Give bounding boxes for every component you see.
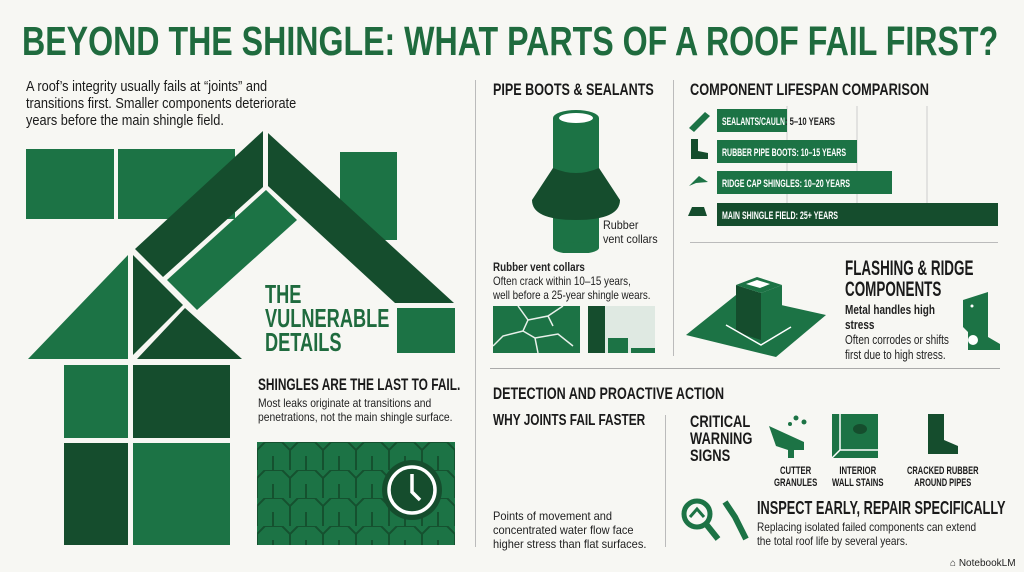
- icon: flashing chimney: [686, 277, 826, 357]
- text: shingles last: [258, 375, 460, 424]
- icon: gutter granules: GRANULES: [774, 477, 817, 489]
- icon: pipe boot: [532, 110, 620, 253]
- text: well before a 25-year shingle wears.: [493, 288, 651, 302]
- icon: wall stains: [832, 414, 884, 489]
- icon: gutter granules: CUTTER: [780, 465, 811, 477]
- heading: the vulnerable details: [265, 279, 389, 357]
- icon: wall stains: INTERIOR: [839, 465, 876, 477]
- icon: cracked rubber: [907, 414, 978, 489]
- icon: cracked rubber: [493, 306, 655, 353]
- text: flashing & ridge: Often corrodes or shifts: [845, 333, 949, 347]
- text: why joints fail: [493, 412, 646, 551]
- text: shingles last: Most leaks originate at transitions and penetrations, not the main shingle surface.: [258, 396, 452, 424]
- heading: detection: DETECTION AND PROACTIVE ACTION: [493, 384, 724, 403]
- intro text: [26, 79, 296, 129]
- bar chart: RIDGE CAP SHINGLES: 10–20 YEARS: [722, 178, 850, 190]
- icon: wall stains: WALL STAINS: [832, 477, 883, 489]
- intro text: transitions first. Smaller components deteriorate: [26, 96, 296, 112]
- text: flashing & ridge: [845, 257, 973, 362]
- text: flashing & ridge: stress: [845, 318, 874, 332]
- icon: cracked rubber: AROUND PIPES: [914, 477, 971, 489]
- title: BEYOND THE SHINGLE: WHAT PARTS OF A ROOF FAIL FIRST?: [22, 18, 998, 64]
- text: flashing & ridge: first due to high stress.: [845, 348, 946, 362]
- bar chart: SEALANTS/CAULN: [722, 116, 785, 128]
- text: inspect early: [757, 497, 1006, 548]
- text: flashing & ridge: Metal handles high: [845, 303, 935, 317]
- icon: bracket: [963, 292, 1000, 350]
- heading: critical warning signs: [690, 412, 752, 465]
- heading: critical warning signs: SIGNS: [690, 446, 730, 465]
- bar chart: : 5–10 YEARS: [785, 116, 835, 128]
- text: shingles last: SHINGLES ARE THE LAST TO FAIL.: [258, 375, 460, 394]
- bar chart: RUBBER PIPE BOOTS: 10–15 YEARS: [722, 147, 846, 159]
- intro text: A roof’s integrity usually fails at “joints” and: [26, 79, 267, 95]
- dividers: [475, 80, 476, 547]
- heading: COMPONENT LIFESPAN COMPARISON: [690, 80, 929, 99]
- text: inspect early: Replacing isolated failed components can extend the total roof life by several years.: [757, 520, 976, 548]
- icon: cracked rubber: CRACKED RUBBER: [907, 465, 978, 477]
- heading: the vulnerable details: VULNERABLE: [265, 303, 389, 333]
- house illustration: [26, 131, 455, 545]
- panel: pipe boots: [493, 80, 658, 353]
- caption: Rubber: [603, 218, 638, 232]
- text: flashing & ridge: FLASHING & RIDGE: [845, 257, 973, 280]
- icon: gutter granules: [769, 416, 817, 489]
- text: [493, 260, 651, 302]
- caption: vent collars: [603, 232, 658, 246]
- bar chart: [688, 106, 998, 226]
- logo: ⌂ NotebookLM: [950, 558, 1016, 569]
- text: inspect early: INSPECT EARLY, REPAIR SPECIFICALLY: [757, 497, 1005, 518]
- intro text: years before the main shingle field.: [26, 113, 224, 129]
- heading: the vulnerable details: DETAILS: [265, 327, 342, 357]
- heading: critical warning signs: CRITICAL: [690, 412, 750, 431]
- heading: the vulnerable details: THE: [265, 279, 301, 309]
- text: why joints fail: WHY JOINTS FAIL FASTER: [493, 412, 645, 429]
- text: flashing & ridge: COMPONENTS: [845, 278, 941, 301]
- heading: critical warning signs: WARNING: [690, 429, 752, 448]
- text: Rubber vent collars: [493, 260, 585, 274]
- bar chart: MAIN SHINGLE FIELD: 25+ YEARS: [722, 210, 838, 222]
- shingle panel with clock: [257, 442, 455, 545]
- icon: magnifier and wrench: [682, 498, 749, 541]
- text: Often crack within 10–15 years,: [493, 274, 631, 288]
- caption: [603, 218, 658, 246]
- text: why joints fail: Points of movement and concentrated water flow face higher stress than flat surfaces.: [493, 509, 646, 551]
- panel: lifespan chart: [688, 80, 998, 226]
- heading: PIPE BOOTS & SEALANTS: [493, 80, 654, 99]
